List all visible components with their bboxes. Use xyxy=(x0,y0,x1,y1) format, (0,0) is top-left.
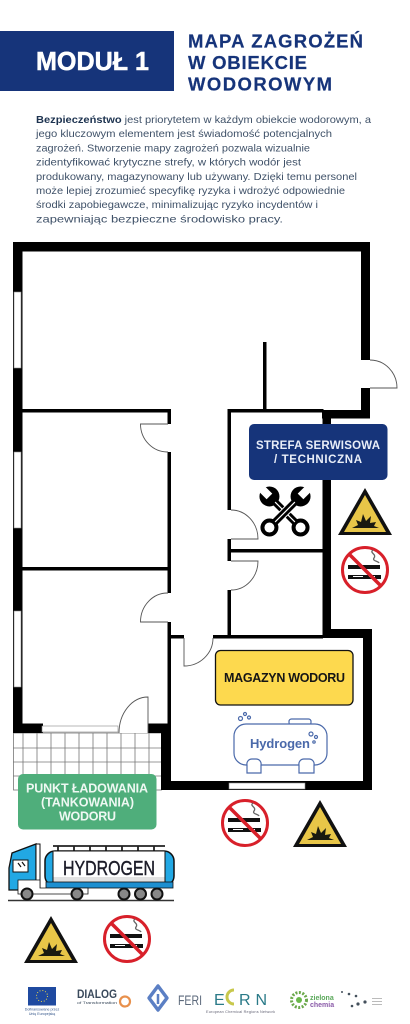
intro paragraph xyxy=(35,115,371,225)
header banner: module number xyxy=(0,31,174,91)
logo: European Union: Dofinansowane przez xyxy=(25,1008,59,1012)
left-top wrench xyxy=(255,482,313,540)
logo: Dialog of Transformation: DIALOG xyxy=(77,989,117,1001)
icon: explosion hazard triangle, service zone xyxy=(338,488,392,535)
logo: zielona chemia: chemia xyxy=(310,1002,334,1009)
label: charging point: PUNKT ŁADOWANIA xyxy=(26,782,148,796)
label: hydrogen storage xyxy=(216,650,353,705)
intro paragraph: Bezpieczeństwo jest priorytetem w każdym obiekcie wodorowym, a xyxy=(36,115,371,126)
logo: FERI xyxy=(149,986,202,1010)
intro paragraph: produkowany, magazynowany lub używany. Dzięki temu personel xyxy=(36,172,357,183)
intro paragraph: może lepiej zrozumieć specyfikę ryzyka i wdrożyć odpowiednie xyxy=(36,186,345,197)
intro paragraph: zapewniając bezpieczne środowisko pracy. xyxy=(36,214,283,225)
icon: hydrogen tanker truck xyxy=(8,844,174,900)
icon: hydrogen storage tank: Hydrogen xyxy=(250,736,310,751)
windows xyxy=(14,292,305,789)
logo: ECRN: European Chemical Regions Network xyxy=(206,1010,275,1014)
title: MAPA ZAGROŻEŃ xyxy=(188,30,363,52)
icon: crossed wrenches xyxy=(255,482,315,540)
title xyxy=(188,30,363,94)
outer and thick walls xyxy=(13,242,372,790)
logo: European Union: Unię Europejską xyxy=(29,1012,55,1016)
logo: ECRN: E RN xyxy=(214,992,267,1009)
title: WODOROWYM xyxy=(188,74,332,94)
intro paragraph: jego kluczowym elementem jest świadomość potencjalnych xyxy=(35,129,332,140)
floor plan xyxy=(13,242,397,790)
logo: Dialog of Transformation: of Transformation xyxy=(77,1000,117,1005)
intro paragraph: zidentyfikować krytyczne strefy, w których wodór jest xyxy=(36,158,301,169)
icon: explosion hazard triangle, storage xyxy=(293,800,347,847)
icon: no smoking sign, service zone xyxy=(342,548,388,592)
logo: zielona chemia: zielona xyxy=(310,995,334,1002)
thin interior walls xyxy=(22,342,324,726)
label: service zone: / TECHNICZNA xyxy=(274,454,362,466)
intro paragraph: środki zapobiegawcze, minimalizując ryzyko incydentów i xyxy=(36,200,318,211)
label: service zone: STREFA SERWISOWA xyxy=(256,440,380,452)
logo: ECRN xyxy=(206,990,275,1014)
hydrogen charging tile floor xyxy=(13,733,162,790)
logo: FERI: FERI xyxy=(178,992,202,1008)
label: charging point xyxy=(18,774,156,830)
label: hydrogen storage: MAGAZYN WODORU xyxy=(224,671,345,685)
logo: birds xyxy=(341,991,382,1007)
logo: Dialog of Transformation xyxy=(77,989,130,1006)
label: charging point: WODORU xyxy=(59,810,116,824)
icon: explosion hazard triangle, charging point xyxy=(24,916,78,963)
icon: no smoking sign, storage xyxy=(222,800,268,846)
label: charging point: (TANKOWANIA) xyxy=(41,796,134,810)
icon: hydrogen storage tank xyxy=(234,712,327,773)
icon: hydrogen tanker truck: HYDROGEN xyxy=(63,858,155,880)
logo: zielona chemia xyxy=(292,992,334,1009)
icon: no smoking sign, charging point xyxy=(104,916,150,962)
label: service zone xyxy=(249,424,388,480)
logo: European Union xyxy=(25,987,59,1016)
header banner: module number: MODUŁ 1 xyxy=(36,48,149,76)
intro paragraph: zagrożeń. Stworzenie mapy zagrożeń pozwala wizualnie xyxy=(36,143,310,154)
title: W OBIEKCIE xyxy=(188,52,307,73)
door swings xyxy=(119,360,397,733)
right-top wrench xyxy=(257,482,315,540)
